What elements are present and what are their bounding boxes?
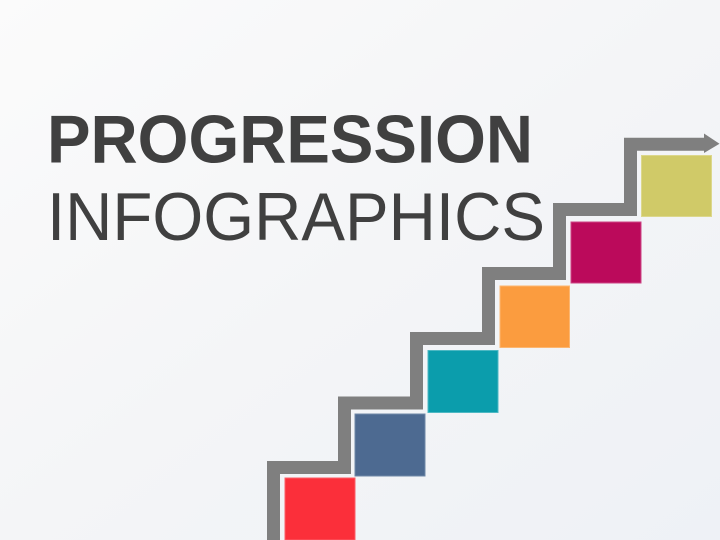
title line: PROGRESSION: PROGRESSION — [47, 102, 533, 178]
step 4: orange — [500, 286, 570, 348]
step 3: teal — [428, 350, 498, 412]
step 2: blue — [355, 414, 425, 476]
title — [47, 102, 545, 255]
step 1: red — [285, 478, 355, 540]
step 5: magenta — [571, 222, 641, 283]
stair arrow — [274, 134, 720, 540]
step squares — [285, 156, 712, 540]
step 6: yellow — [642, 156, 712, 216]
title line: INFOGRAPHICS: INFOGRAPHICS — [47, 179, 545, 255]
